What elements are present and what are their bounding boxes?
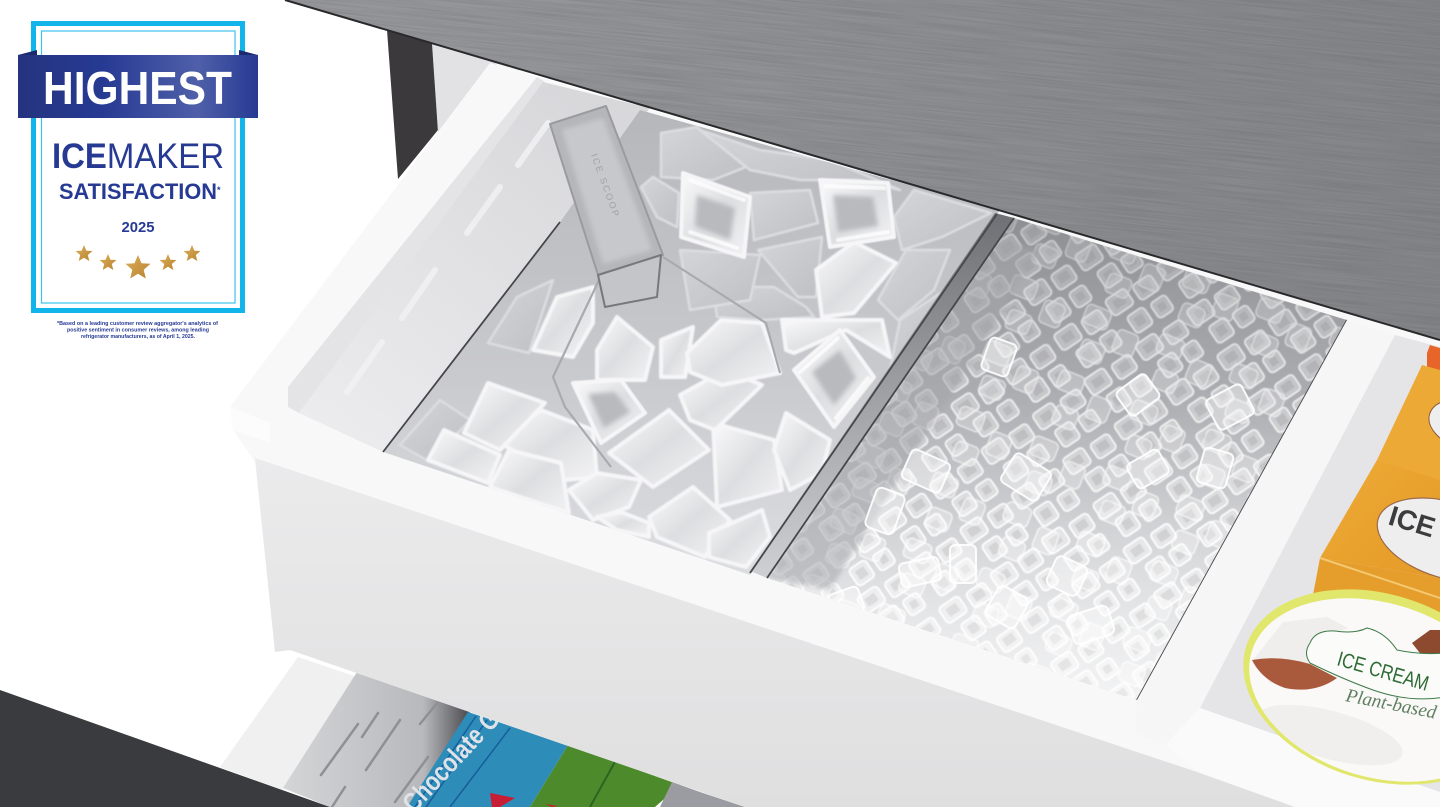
scoop wire frame [553, 257, 780, 467]
footnote [57, 321, 218, 340]
ice cream tub lid [1243, 589, 1440, 785]
upper box label [1423, 391, 1440, 459]
footnote: refrigerator manufacturers, as of April 1, 2025. [81, 334, 196, 340]
ice scoop [550, 106, 780, 467]
lower drawer with food boxes [0, 657, 745, 807]
heading: HIGHEST [43, 62, 232, 114]
stainless steel door [284, 0, 1440, 341]
blue granola bar box [396, 704, 568, 807]
brushed steel texture [290, 0, 1440, 335]
scoop neck [598, 255, 661, 307]
gray item at lower right [660, 782, 745, 807]
crushed ice bin [760, 210, 1360, 710]
ice cube inside scoop [573, 380, 645, 443]
handle embossed text: ICE SCOOP [589, 152, 622, 220]
lid artwork [1251, 617, 1440, 778]
banner fold tabs [18, 50, 258, 55]
lower drawer pale rails [220, 657, 360, 790]
front ice cubes [428, 242, 896, 567]
almond [1412, 630, 1440, 654]
cloud label [1306, 628, 1440, 699]
orange box main side [1320, 460, 1440, 578]
right white divider bar [1135, 320, 1395, 745]
hero ice cube upper right [820, 180, 894, 247]
inner drawer wall with ribs [299, 82, 650, 452]
year: 2025 [122, 220, 154, 236]
banner [18, 55, 258, 118]
left bin with large ice cubes [383, 110, 1000, 575]
highlighted crushed ice pieces [827, 336, 1256, 646]
scoop handle [550, 106, 663, 275]
orange box lower fold [1313, 558, 1440, 625]
lower drawer slotted panel [283, 672, 470, 807]
asterisk: * [217, 185, 221, 195]
lid rim [1219, 558, 1440, 807]
right compartment wall [1200, 335, 1440, 795]
green snack boxes [530, 745, 680, 807]
icemaker title: ICEMAKER [52, 137, 224, 176]
orange box upper flap [1377, 365, 1440, 482]
award badge [18, 24, 258, 340]
orange ice cream box [1313, 345, 1440, 625]
footnote: *Based on a leading customer review aggregator's analytics of [57, 321, 218, 327]
five gold stars [76, 245, 200, 278]
coconut shell [1252, 658, 1337, 690]
hero ice cube right [794, 330, 874, 427]
right compartment front rim [1165, 708, 1440, 807]
footnote: positive sentiment in consumer reviews, among leading [67, 328, 209, 334]
bin edge lines [383, 214, 1347, 700]
drawer rim left side [230, 63, 545, 443]
lower black door panel [0, 690, 330, 807]
light cavity behind drawer [432, 44, 520, 132]
dark door side column [387, 30, 438, 179]
back ice layer [400, 127, 991, 462]
bin divider [750, 213, 1014, 578]
hero ice cube upper left [681, 173, 750, 257]
coconut flesh [1253, 617, 1348, 690]
milk swirl [1262, 705, 1402, 765]
crushed ice texture [760, 210, 1360, 710]
upper drawer body [230, 63, 1440, 807]
drawer front face [255, 458, 1295, 807]
badge panel [34, 24, 242, 310]
orange box tab [1427, 345, 1440, 372]
plant-based script: Plant-based [1343, 685, 1439, 724]
box oval label [1367, 483, 1440, 597]
lid face [1226, 568, 1440, 807]
satisfaction subtitle: SATISFACTION [59, 179, 217, 204]
